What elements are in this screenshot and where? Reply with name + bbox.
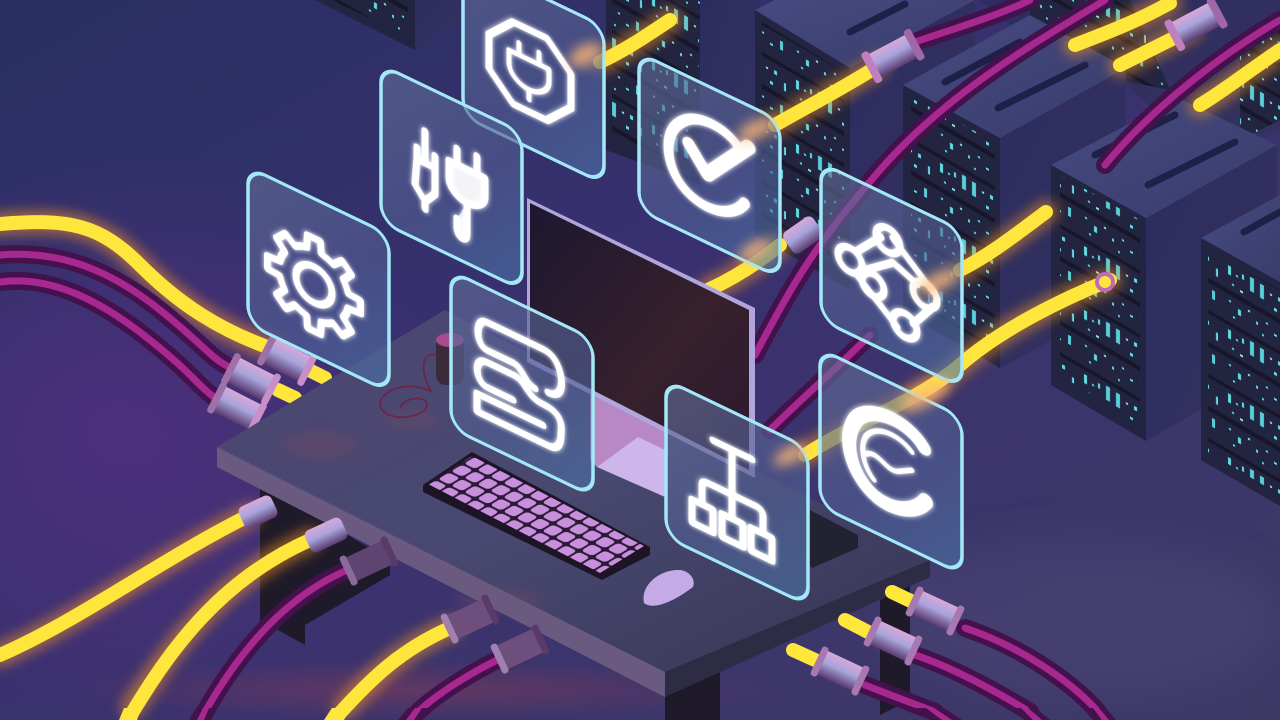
icon: check mark <box>668 103 749 227</box>
monitor stand <box>590 385 668 497</box>
desk legs <box>260 485 910 720</box>
panel: C logo <box>820 349 962 574</box>
panel: circuit band <box>821 163 962 388</box>
monitor <box>527 198 755 497</box>
connectors on server cables <box>781 0 1229 292</box>
mouse <box>643 570 694 606</box>
server: third row <box>755 0 975 290</box>
icon: two plugs <box>415 126 485 249</box>
icon: octagon plug <box>489 10 571 132</box>
panel: hierarchy <box>666 380 808 605</box>
icon: gear <box>268 216 360 354</box>
speaker and tangled wire <box>380 333 464 417</box>
server: second row <box>903 15 1126 368</box>
icon: C logo <box>849 398 926 523</box>
server racks <box>315 0 1280 506</box>
desk top <box>217 310 930 672</box>
panel: linked S <box>451 271 593 496</box>
icon: circuit band <box>838 204 937 353</box>
cables left <box>0 222 325 435</box>
icon: linked S shape <box>477 317 561 452</box>
orange light bleeding through panels <box>564 38 962 471</box>
server: back centre <box>606 0 760 185</box>
panel: octagon plug <box>463 0 604 184</box>
server: top right back pair <box>980 0 1280 160</box>
server: top left back <box>315 0 460 50</box>
icon: hierarchy tree <box>692 430 772 561</box>
cables behind panels <box>600 0 1280 455</box>
panel: check mark <box>639 53 780 278</box>
left connectors <box>206 333 318 435</box>
panel: plugs <box>381 65 522 290</box>
lower connectors <box>237 494 965 696</box>
mini PC <box>806 508 858 568</box>
monitor screen <box>527 198 755 478</box>
glass icon panels <box>248 0 962 605</box>
cables under desk <box>0 494 1116 720</box>
server: front row <box>1051 98 1277 441</box>
panel: gear <box>248 167 389 392</box>
desk <box>217 310 930 720</box>
cable ends running off the bottom edge <box>119 708 1116 720</box>
keyboard <box>423 452 650 580</box>
server: far right <box>1201 195 1280 506</box>
